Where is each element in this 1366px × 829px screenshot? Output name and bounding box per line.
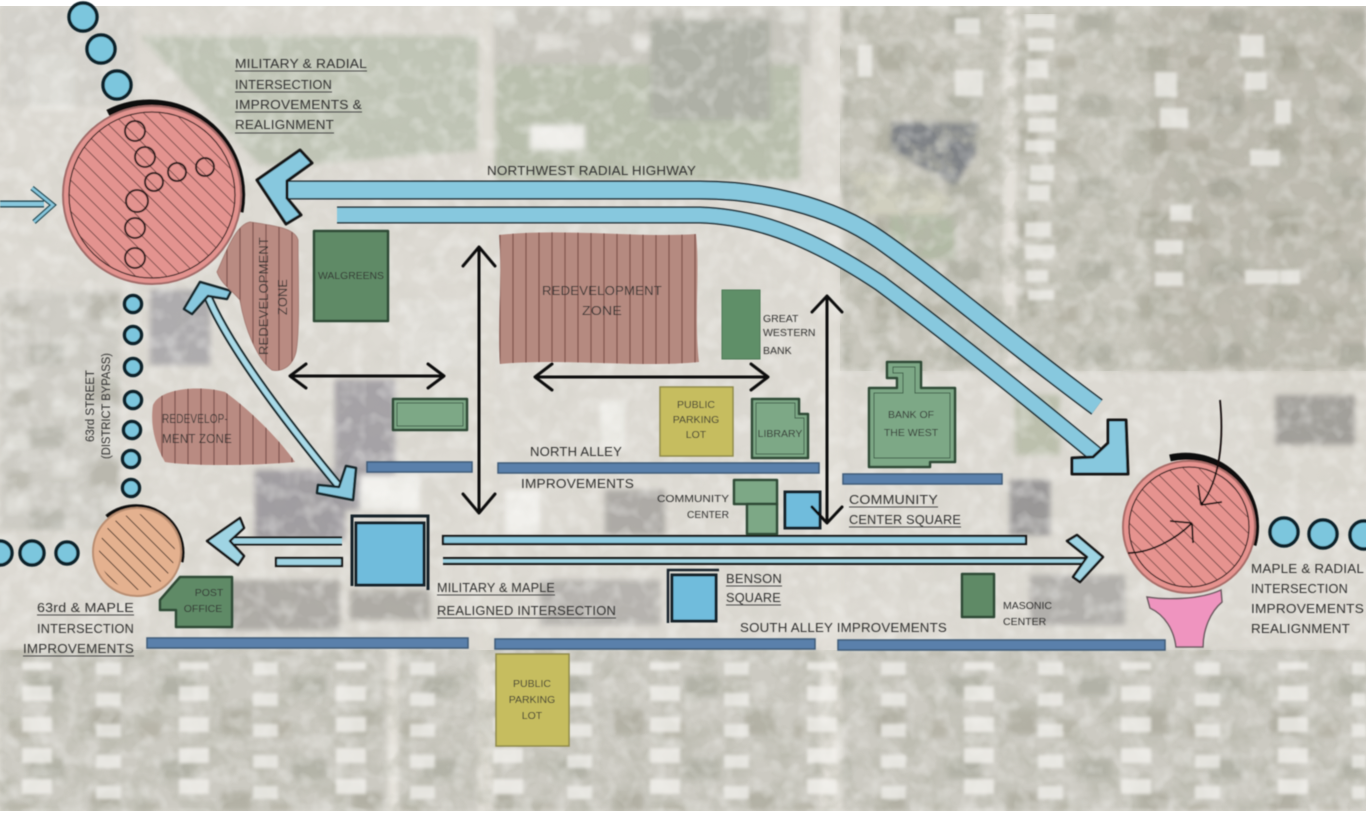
- label: Military and Radial: [235, 56, 367, 133]
- redevelopment zone: centre: REDEVELOPMENT: [542, 283, 662, 298]
- arrow: Military Avenue diagonal double-headed: [184, 282, 356, 500]
- bypass dots: north-west: [69, 3, 131, 99]
- label: Military and Maple realigned intersection: REALIGNED INTERSECTION: [437, 603, 616, 618]
- label: Maple and Radial: MAPLE & RADIAL: [1251, 561, 1364, 576]
- label: North Alley Improvements: NORTH ALLEY: [530, 444, 622, 459]
- label: North Alley Improvements: IMPROVEMENTS: [521, 476, 634, 491]
- label: 63rd and Maple: IMPROVEMENTS: [23, 641, 134, 656]
- label: South Alley Improvements: SOUTH ALLEY IMPROVEMENTS: [740, 620, 947, 635]
- public parking lot south: PARKING: [509, 694, 555, 706]
- intersection circle: 63rd and Maple: [93, 507, 182, 596]
- redevelopment zone: south-west: REDEVELOP-: [162, 411, 228, 426]
- Military and Maple realigned intersection square: [352, 516, 428, 590]
- public parking lot south: [496, 654, 569, 746]
- public parking lot north: [660, 387, 733, 456]
- building: Masonic Center: CENTER: [1003, 616, 1047, 628]
- public parking lot south: LOT: [522, 710, 543, 722]
- label: 63rd Street bypass: (DISTRICT BYPASS): [101, 353, 113, 459]
- building: Library: [752, 399, 808, 458]
- label: Military and Maple realigned intersection: MILITARY & MAPLE: [437, 580, 555, 595]
- redevelopment zone: south-west: [152, 388, 295, 465]
- building: Post Office: [160, 577, 232, 627]
- label: Military and Radial: REALIGNMENT: [235, 117, 334, 132]
- double arrow: horizontal west: [290, 364, 444, 388]
- label: Community Center Square: [849, 492, 961, 527]
- arrow: Maple Street westbound: [207, 518, 342, 566]
- building: Bank of the West: [869, 362, 955, 467]
- intersection circle: Military and Radial: [63, 103, 242, 284]
- building: Community Center: [657, 480, 777, 534]
- double arrow: vertical east: [812, 296, 842, 523]
- label: Maple and Radial: INTERSECTION: [1251, 581, 1348, 596]
- building: Bank of the West: BANK OF: [888, 409, 934, 421]
- arrow: Maple Street eastbound: [443, 535, 1103, 582]
- redevelopment zone: west: [217, 222, 298, 370]
- bypass dots: 63rd Street: [122, 296, 142, 496]
- building: Great Western Bank: [722, 290, 816, 359]
- label: Benson Square: SQUARE: [726, 590, 781, 605]
- intersection circle: Maple and Radial: [1123, 400, 1256, 593]
- public parking lot north: PUBLIC: [677, 399, 715, 411]
- Benson Square: [668, 570, 719, 623]
- building: Library: LIBRARY: [758, 428, 802, 440]
- label: Maple and Radial: IMPROVEMENTS: [1251, 601, 1364, 616]
- building: Community Center: COMMUNITY: [657, 493, 729, 505]
- alley improvements bars: [147, 462, 1165, 650]
- road: Northwest Radial Highway lower band with arrowhead: [337, 215, 1128, 474]
- building: Walgreens: WALGREENS: [318, 270, 384, 282]
- public parking lot north: LOT: [686, 429, 707, 441]
- label: Community Center Square: COMMUNITY: [849, 492, 938, 507]
- label: Military and Maple realigned intersection: [437, 580, 616, 618]
- label: Benson Square: [726, 571, 782, 605]
- label: Maple and Radial: REALIGNMENT: [1251, 621, 1350, 636]
- redevelopment zone: centre: ZONE: [582, 303, 622, 318]
- label: Benson Square: BENSON: [726, 571, 782, 586]
- public parking lot south: PUBLIC: [513, 678, 551, 690]
- building: Bank of the West: THE WEST: [884, 427, 939, 439]
- arrow: entry from west: [0, 188, 53, 222]
- label: Community Center Square: CENTER SQUARE: [849, 512, 961, 527]
- redevelopment zone: centre: [499, 232, 699, 364]
- label: 63rd and Maple: [23, 600, 134, 656]
- label: Military and Radial: IMPROVEMENTS &: [235, 97, 362, 112]
- building: Great Western Bank: BANK: [763, 345, 792, 357]
- bypass dots: east Maple: [1270, 518, 1366, 549]
- label: Maple and Radial: [1251, 561, 1364, 636]
- label: 63rd and Maple: INTERSECTION: [37, 621, 134, 636]
- label: Military and Radial: INTERSECTION: [235, 77, 332, 92]
- road: Northwest Radial Highway upper band with arrowhead: [257, 150, 1097, 407]
- Community Center Square: [785, 492, 820, 528]
- redevelopment zone: south-west: MENT ZONE: [162, 431, 232, 446]
- bypass dots: west Maple: [0, 541, 78, 565]
- double arrow: horizontal centre: [535, 364, 768, 390]
- building: Masonic Center: MASONIC: [1003, 600, 1052, 612]
- building: Community Center: CENTER: [687, 509, 729, 521]
- label: 63rd and Maple: 63rd & MAPLE: [37, 600, 134, 615]
- label: Military and Radial: MILITARY & RADIAL: [235, 56, 367, 71]
- building: Walgreens: [314, 231, 388, 321]
- building: Great Western Bank: WESTERN: [763, 327, 816, 339]
- label: North Alley Improvements: [521, 444, 634, 491]
- double arrow: vertical west: [463, 247, 495, 513]
- building: Great Western Bank: GREAT: [763, 313, 799, 325]
- public parking lot north: PARKING: [673, 414, 719, 426]
- redevelopment zone: west: REDEVELOPMENT: [256, 237, 271, 355]
- label: 63rd Street bypass: [85, 353, 113, 459]
- pink plaza: [1147, 590, 1222, 647]
- building: Post Office: POST: [195, 587, 224, 599]
- building: Masonic Center: [962, 574, 1052, 628]
- building: unnamed: [393, 399, 467, 430]
- building: Post Office: OFFICE: [184, 603, 222, 615]
- label: 63rd Street bypass: 63rd STREET: [85, 370, 97, 442]
- label: Northwest Radial Highway: NORTHWEST RADIAL HIGHWAY: [487, 163, 696, 178]
- redevelopment zone: west: ZONE: [275, 279, 290, 315]
